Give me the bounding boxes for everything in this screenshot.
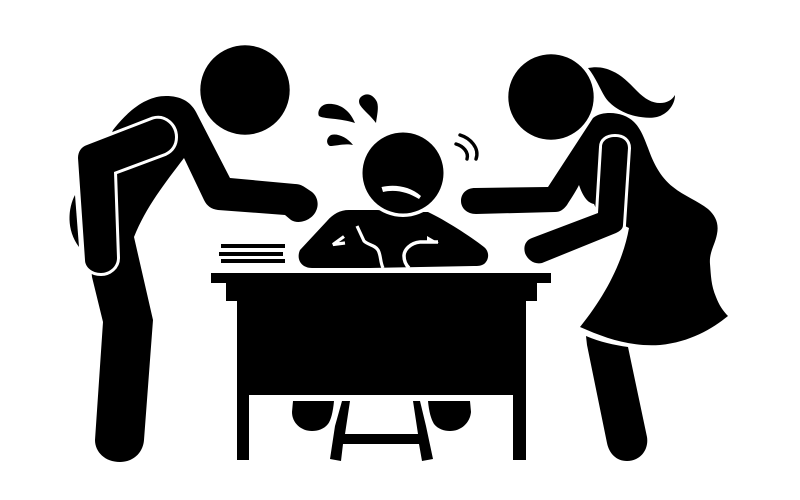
figure: woman on right [461, 54, 728, 461]
woman dress and pointing arm [461, 113, 728, 345]
woman near arm [524, 137, 628, 263]
man head [200, 45, 290, 135]
sweat drop top [359, 94, 378, 123]
woman leg [586, 336, 647, 461]
figure: student at desk [299, 94, 488, 268]
student right arm crease [404, 242, 438, 268]
student torso and arms [299, 210, 488, 268]
chair [330, 401, 433, 461]
student knees and chair under desk [292, 401, 471, 461]
student frown [382, 186, 421, 199]
man torso and pointing arm [85, 96, 318, 462]
man near arm [78, 119, 175, 273]
student left arm crease [333, 226, 383, 268]
student head [362, 132, 444, 214]
man back bulge [69, 195, 79, 247]
woman ponytail [588, 67, 675, 118]
desk [211, 273, 551, 460]
left knee [292, 401, 334, 431]
student arrow tip crease [427, 236, 439, 243]
woman head [508, 54, 594, 140]
sweat drop large [318, 104, 355, 123]
sweat drop small [327, 134, 353, 146]
stack of papers [219, 244, 285, 263]
right knee [428, 401, 471, 431]
figure: man on left [69, 45, 318, 462]
sound arcs [456, 135, 477, 159]
